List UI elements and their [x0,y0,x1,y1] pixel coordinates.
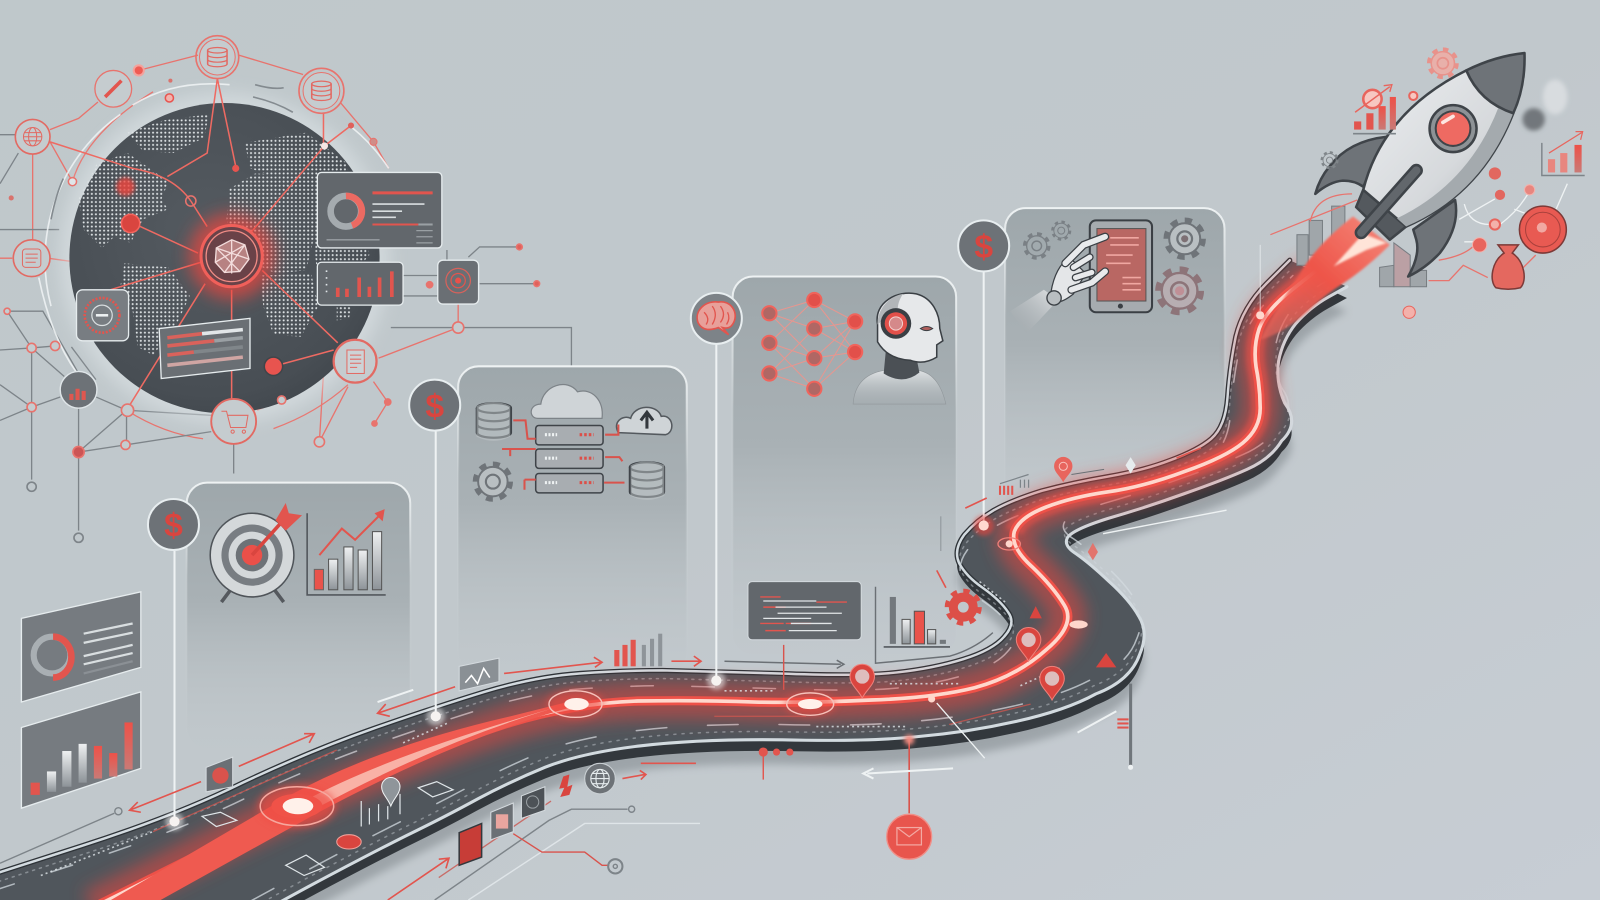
road: red band upper section [1014,270,1316,532]
rocket [1315,53,1525,277]
rocket side: back gear [1322,152,1337,168]
panel: strategy card [187,483,410,748]
bottom tile: document [491,803,513,840]
road: red stream [92,270,1316,900]
icon: robot head [853,293,946,404]
road: glowing node 1 [258,785,336,828]
badge: dollar step four [958,220,1009,271]
icon: document node right [334,340,377,383]
badge: brain [691,293,742,344]
flame [1260,216,1390,340]
bottom tile: red [459,823,482,865]
network: hub spokes [50,79,351,410]
envelope badge [887,735,932,859]
chart: neural network [762,293,862,396]
red dots near rocket [1403,167,1535,318]
road: stream highlight [92,270,1316,900]
connector: step three line [707,344,726,690]
panel: AI card [733,277,956,654]
network: connection lines behind globe [0,55,571,531]
panel: code dashboard [748,582,861,640]
icon: red gear [947,591,979,623]
badge: dollar step four: $ [974,229,993,266]
panel: bar dashboard [317,262,403,305]
chart: rising bars [307,509,386,595]
gray line left of road [0,808,122,863]
icon: target with arrow [210,503,302,602]
icon: data architecture [475,385,672,500]
red network near rocket [1270,184,1567,281]
bottom tile: dark [521,787,545,818]
globe [69,103,380,413]
road: glowing node 3 [785,692,836,716]
small red badge on road [337,835,361,849]
hub node [189,213,274,299]
badge: dollar step one [148,499,199,550]
money bag [1492,245,1524,289]
icon: database top [196,36,239,79]
road: ground shadow [0,285,1347,900]
icon: globe node [15,119,50,154]
arrows: white [378,510,1227,779]
tile: small red emblem [206,757,233,792]
arrows: red [130,448,1201,900]
road: small glow markers [928,538,1088,703]
icon: wrench node [95,70,132,107]
network: glowing globe nodes [9,65,377,376]
three road dots [759,747,793,780]
coin [1519,206,1566,253]
road: edge lines [0,260,1347,900]
network: orbit arcs [39,84,389,372]
network: bottom lines [435,806,700,900]
badge: dollar step two: $ [425,388,444,425]
panel: donut dashboard [317,172,442,248]
rocket side: top gear [1429,49,1457,77]
road: lane dashes [0,268,1345,900]
chart: rocket right [1542,132,1585,176]
small items near road curve [941,457,1136,729]
icon: database right [299,68,344,113]
icon: small red mark [559,774,572,797]
road sign glyphs [202,782,453,876]
connector: gray arrow [724,660,844,668]
road: surface [0,260,1347,900]
icon: gears and robot hand with tablet [1010,220,1203,334]
connector: step four line [973,271,994,536]
road: red lane lines [153,704,1031,878]
gray pole [1128,684,1133,770]
smoke [1522,80,1567,131]
connector: step two line [427,431,445,726]
panel: radar tile [438,260,479,304]
pins on road [850,628,1064,700]
road: dotted markings [41,582,1061,876]
warning signs [1030,606,1116,667]
chart: rocket left [1353,85,1417,134]
panel: data card [458,366,687,672]
badge: dollar step one: $ [164,508,183,545]
tile: small chart [459,658,499,691]
panel: gauge tile [77,290,129,341]
road: tapered red band bottom-left [80,700,576,900]
icon: document node left [13,240,50,277]
connector: dashboard drop line [783,645,785,690]
network: small rings [4,244,540,542]
panel: left bar dashboard [21,692,141,808]
chart: small road bars [614,634,662,666]
globe halo [59,93,390,423]
chart: lower bars [876,587,993,663]
icon: cart node [211,399,256,444]
connector: step one line [165,551,184,831]
icon: dark chart node [60,371,97,408]
road end dot [1252,245,1268,323]
icon: globe circle [585,763,615,794]
road: thick side [0,271,1347,900]
pin on lane [361,778,400,827]
road: red glow [92,270,1316,900]
panel: automation card [1005,208,1224,514]
panel: left donut dashboard [21,592,141,702]
road: glowing node 2 [547,690,604,718]
badge: dollar step two [409,380,460,431]
panel: progress bars tile [159,318,250,379]
city buildings [1297,206,1427,287]
